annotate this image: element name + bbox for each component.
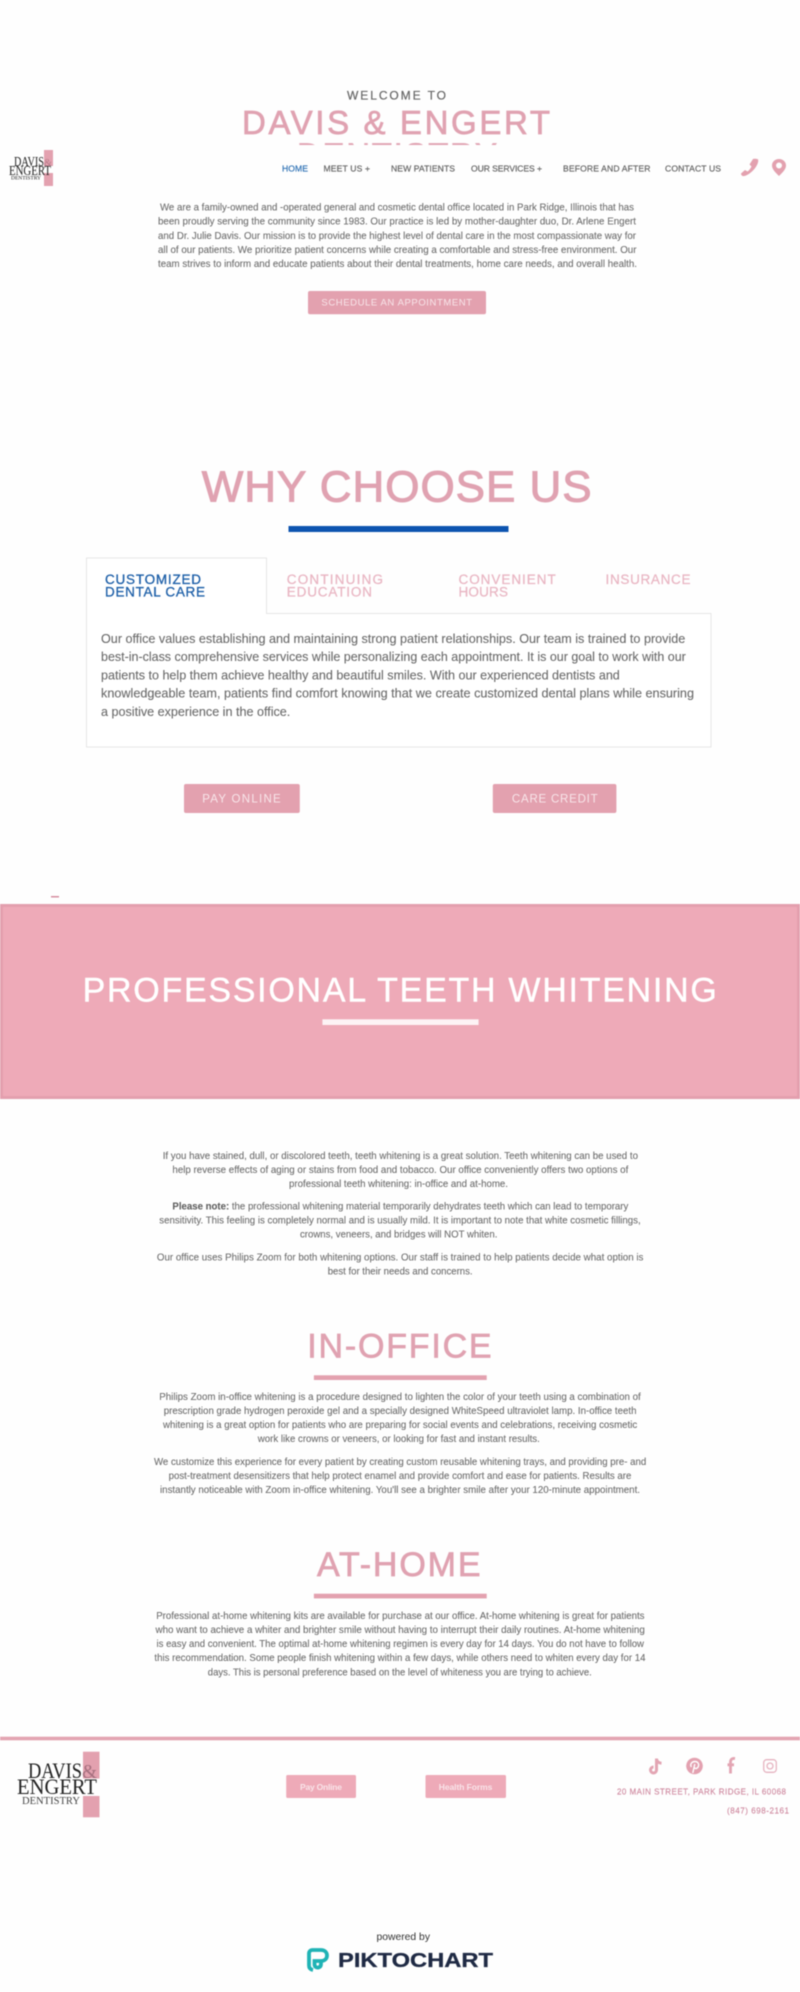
in-office text: post-treatment desensitizers that help protect enamel and provide comfort and ease for patients. Results are [169, 1471, 632, 1482]
logo: header: DENTISTRY [11, 176, 41, 182]
banner title: PROFESSIONAL TEETH WHITENING [83, 972, 717, 1010]
hero heading: DAVIS & ENGERT [242, 104, 550, 141]
icon: piktochart [309, 1950, 327, 1970]
button: pay online [184, 784, 300, 813]
button: care credit: CARE CREDIT [512, 794, 598, 806]
footer contact: 20 MAIN STREET, PARK RIDGE, IL 60068 [617, 1788, 787, 1796]
tab: continuing education: EDUCATION [287, 585, 372, 600]
navigation: NEW PATIENTS [391, 164, 455, 174]
intro text: whitening: sensitivity. This feeling is completely normal and is usually mild. It is important to note that white cosmetic fillings, [159, 1215, 641, 1226]
at-home text [154, 1611, 646, 1678]
intro text: whitening: Please note: the professional whitening material temporarily dehydrates teeth which can lead to temporary [172, 1201, 628, 1212]
intro text: whitening: professional teeth whitening: in-office and at-home. [289, 1179, 508, 1190]
intro paragraph: We are a family-owned and -operated general and cosmetic dental office located in Park Ridge, Illinois that has [160, 202, 634, 214]
navigation: HOME [282, 164, 308, 174]
tab panel [86, 558, 711, 747]
navigation: BEFORE AND AFTER [563, 164, 650, 174]
intro paragraph: all of our patients. We prioritize patient concerns while creating a comfortable and stress-free environment. Our [158, 245, 637, 256]
button: footer health forms [426, 1775, 506, 1798]
tab: customized dental care: DENTAL CARE [105, 585, 205, 600]
intro paragraph [158, 202, 637, 270]
tab body text: Our office values establishing and maintaining strong patient relationships. Our team is trained to provide [101, 631, 685, 646]
icon: phone [741, 159, 758, 176]
in-office text: instantly noticeable with Zoom in-office whitening. You'll see a brighter smile after your 120-minute appointment. [160, 1485, 640, 1496]
in-office text: whitening is a great option for patients who are preparing for social events and celebrations, receiving cosmetic [162, 1420, 637, 1431]
icon: tiktok [650, 1758, 662, 1773]
logo: footer: ENGERT [17, 1774, 97, 1799]
button: footer pay online: Pay Online [300, 1782, 342, 1792]
intro text: whitening: Our office uses Philips Zoom for both whitening options. Our staff is trained to help patients decide what option is [157, 1252, 643, 1263]
button: footer health forms: Health Forms [439, 1782, 493, 1792]
button: care credit [493, 784, 616, 813]
footer contact [617, 1788, 790, 1816]
logo: header [9, 150, 53, 186]
piktochart logo: PIKTOCHART [338, 1950, 493, 1972]
intro paragraph: team strives to inform and educate patients about their dental treatments, home care needs, and overall health. [158, 259, 637, 270]
at-home underline [314, 1594, 487, 1598]
navigation: MEET US + [324, 164, 370, 174]
logo: footer: & [82, 1761, 97, 1783]
icon: facebook [728, 1758, 735, 1774]
in-office text: work like crowns or veneers, or looking for fast and instant results. [257, 1434, 540, 1445]
banner underline [322, 1019, 479, 1025]
at-home text: this recommendation. Some people finish whitening within a few days, while others need to whiten every day for 14 [154, 1653, 646, 1664]
logo: footer: DENTISTRY [22, 1796, 80, 1807]
icon: instagram [764, 1760, 776, 1772]
tab body text [101, 631, 694, 719]
at-home text: Professional at-home whitening kits are available for purchase at our office. At-home whitening is great for patients [156, 1611, 644, 1622]
button: footer pay online [286, 1775, 356, 1798]
tab body text: best-in-class comprehensive services while personalizing each appointment. It is our goal to work with our [101, 649, 686, 664]
tab: continuing education: CONTINUING [287, 572, 383, 587]
logo: header: DAVIS [14, 154, 44, 169]
button: schedule: SCHEDULE AN APPOINTMENT [321, 298, 472, 309]
heading: at-home: AT-HOME [317, 1546, 480, 1584]
footer contact: (847) 698-2161 [727, 1806, 790, 1816]
button: pay online: PAY ONLINE [202, 794, 281, 806]
intro paragraph: and Dr. Julie Davis. Our mission is to provide the highest level of dental care in the most compassionate way for [158, 231, 637, 242]
icon: pinterest [686, 1758, 703, 1774]
intro text: whitening: best for their needs and concerns. [328, 1266, 473, 1277]
at-home text: is easy and convenient. The optimal at-home whitening regimen is every day for 14 days. You do not have to follow [156, 1639, 645, 1650]
tab: convenient hours [458, 572, 556, 600]
tab body text: knowledgeable team, patients find comfort knowing that we create customized dental plans while ensuring [101, 686, 694, 701]
intro text: whitening: If you have stained, dull, or discolored teeth, teeth whitening is a great solution. Teeth whitening can be used to [163, 1151, 638, 1162]
tab body text: a positive experience in the office. [101, 704, 290, 719]
logo: header: & [44, 157, 52, 169]
at-home text: days. This is personal preference based on the level of whiteness you are trying to achieve. [208, 1667, 592, 1678]
logo: footer: DAVIS [28, 1758, 82, 1783]
at-home text: who want to achieve a whiter and brighter smile without having to interrupt their daily routines. At-home whitening [155, 1625, 645, 1636]
powered by: powered by [376, 1931, 431, 1943]
button: schedule [308, 291, 486, 314]
tab: customized dental care: CUSTOMIZED [105, 572, 201, 587]
hero heading: WELCOME TO [347, 88, 446, 102]
navigation: OUR SERVICES + [471, 164, 542, 174]
intro paragraph: been proudly serving the community since 1983. Our practice is led by mother-daughter duo, Dr. Arlene Engert [158, 216, 636, 228]
in-office text: prescription grade hydrogen peroxide gel and a specially designed WhiteSpeed ultraviolet lamp. In-office teeth [164, 1406, 636, 1417]
in-office underline [314, 1375, 487, 1380]
intro text: whitening [157, 1151, 643, 1277]
in-office text: Philips Zoom in-office whitening is a procedure designed to lighten the color of your teeth using a combination of [159, 1392, 641, 1403]
tab: convenient hours: CONVENIENT [458, 572, 556, 587]
banner [2, 906, 798, 1098]
in-office text [154, 1392, 646, 1496]
logo: footer [17, 1752, 100, 1817]
icon: map pin [772, 159, 786, 176]
tab: customized dental care [105, 572, 205, 600]
intro text: whitening: crowns, veneers, and bridges will NOT whiten. [300, 1230, 497, 1241]
tab: continuing education [287, 572, 383, 600]
navigation: CONTACT US [665, 164, 721, 174]
heading underline [288, 526, 508, 532]
in-office text: We customize this experience for every patient by creating custom reusable whitening trays, and providing pre- and [154, 1457, 646, 1468]
heading: in-office: IN-OFFICE [307, 1327, 492, 1365]
intro text: whitening: help reverse effects of aging or stains from food and tobacco. Our office conveniently offers two options of [172, 1165, 629, 1176]
logo: header: ENGERT [9, 163, 52, 178]
hero heading: DENTISTRY [297, 136, 497, 174]
heading: why choose us: WHY CHOOSE US [202, 463, 592, 512]
hero heading [244, 90, 550, 146]
navigation [282, 164, 721, 174]
tab body text: patients to help them achieve healthy and beautiful smiles. With our experienced dentists and [101, 667, 620, 682]
tab: insurance: INSURANCE [606, 572, 690, 587]
tab: convenient hours: HOURS [458, 585, 508, 600]
